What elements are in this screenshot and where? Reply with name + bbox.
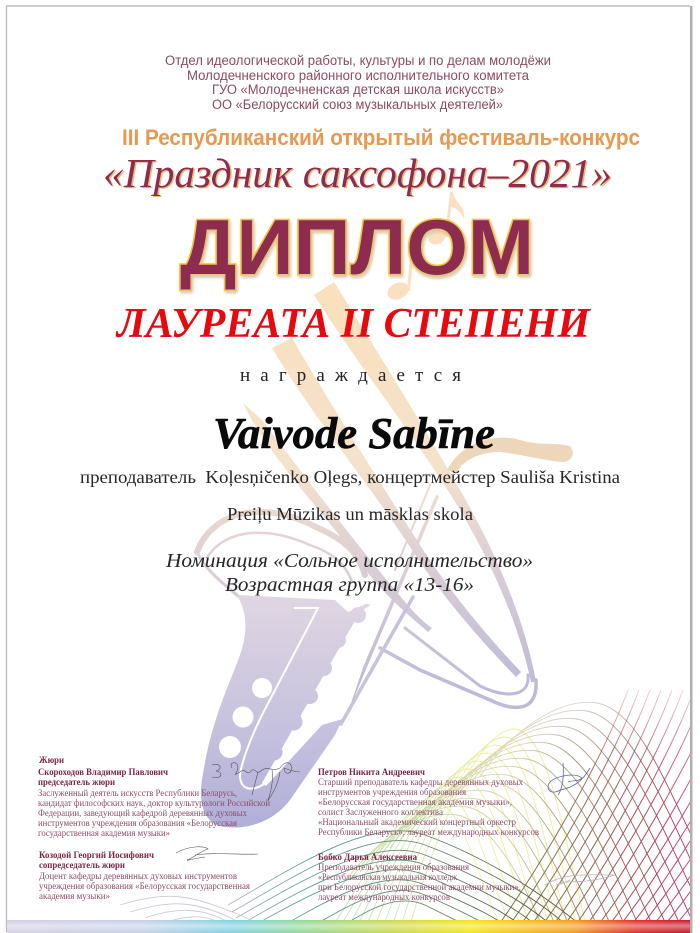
laureate degree: ЛАУРЕАТА II СТЕПЕНИ xyxy=(115,301,591,347)
jury right column xyxy=(318,768,539,903)
header: organisers: ГУО «Молодечненская детская школа искусств» xyxy=(212,82,504,97)
festival name: «Праздник саксофона–2021» xyxy=(103,150,612,196)
nomination: Возрастная группа «13-16» xyxy=(225,574,474,596)
jury right column: солист Заслуженного коллектива xyxy=(318,808,444,818)
jury left column: Скороходов Владимир Павлович xyxy=(38,768,169,778)
jury left column: Козодой Георгий Иосифович xyxy=(39,850,155,861)
jury right column: «Белорусская государственная академия музыки», xyxy=(318,798,512,808)
title: diploma: ДИПЛОМ xyxy=(180,203,534,291)
jury right column: Республики Беларусь», лауреат международных конкурсов xyxy=(318,827,539,838)
awarded to: награждается xyxy=(240,365,461,386)
jury right column: при Белорусской государственной академии музыки», xyxy=(318,882,521,893)
watermark: saxophone neck xyxy=(447,438,573,474)
jury right column: Преподаватель учреждения образования xyxy=(318,862,470,873)
teacher line: преподаватель Koļesņičenko Oļegs, концертмейстер Sauliša Kristina xyxy=(80,467,620,487)
festival subtitle: III Республиканский открытый фестиваль-конкурс xyxy=(122,125,640,150)
jury right column: инструментов учреждения образования xyxy=(318,787,467,798)
watermark: saxophone body xyxy=(201,595,386,828)
watermark: music notes xyxy=(385,192,464,303)
header: organisers xyxy=(165,53,551,112)
jury right column: Старший преподаватель кафедры деревянных духовых xyxy=(318,777,523,788)
jury right column: «Республиканская музыкальная колледж xyxy=(318,872,457,883)
jury right column: Петров Никита Андреевич xyxy=(318,768,426,778)
signature: Bobko xyxy=(545,875,615,885)
jury left column: Заслуженный деятель искусств Республики Беларусь, xyxy=(38,788,237,799)
jury right column: «Национальный академический концертный оркестр xyxy=(318,817,516,828)
jury left column: Доцент кафедры деревянных духовых инструментов xyxy=(39,871,237,882)
signature: co-chairman xyxy=(176,847,258,860)
jury right column: Бобко Дарья Алексеевна xyxy=(318,852,417,863)
jury left column: кандидат философских наук, доктор культурологи Российской xyxy=(38,798,270,809)
jury left column: академия музыки» xyxy=(39,892,110,902)
jury left column: учреждения образования «Белорусская государственная xyxy=(39,881,251,892)
jury right column: лауреат международных конкурсов xyxy=(318,893,450,903)
nomination: Номинация «Сольное исполнительство» xyxy=(165,550,533,572)
jury left column: государственная академия музыки» xyxy=(38,829,170,839)
jury left column: Жюри xyxy=(39,756,64,766)
jury left column xyxy=(38,756,270,902)
watermark: saxophone tubes and arcs xyxy=(197,485,536,724)
jury left column: сопредседатель жюри xyxy=(39,861,125,871)
watermark: saxophone tapered strips xyxy=(243,282,536,682)
recipient name: Vaivode Sabīne xyxy=(213,409,495,458)
watermark: saxophone rod xyxy=(341,597,413,724)
right border xyxy=(690,6,692,933)
jury left column: инструментов учреждения образования «Белорусская xyxy=(38,818,238,829)
jury left column: председатель жюри xyxy=(38,778,115,788)
header: organisers: Отдел идеологической работы, культуры и по делам молодёжи xyxy=(165,53,551,68)
header: organisers: Молодечненского районного исполнительного комитета xyxy=(187,68,529,83)
rainbow bottom bar xyxy=(7,920,690,933)
jury left column: Федерации, заведующий кафедрой деревянных духовых xyxy=(38,808,247,819)
decorative wave lines xyxy=(120,690,700,933)
signature: Petrov xyxy=(548,763,590,795)
school: Preiļu Mūzikas un māsklas skola xyxy=(227,504,473,524)
nomination xyxy=(165,550,533,596)
signature: chairman xyxy=(212,763,300,800)
header: organisers: ОО «Белорусский союз музыкальных деятелей» xyxy=(212,97,503,112)
